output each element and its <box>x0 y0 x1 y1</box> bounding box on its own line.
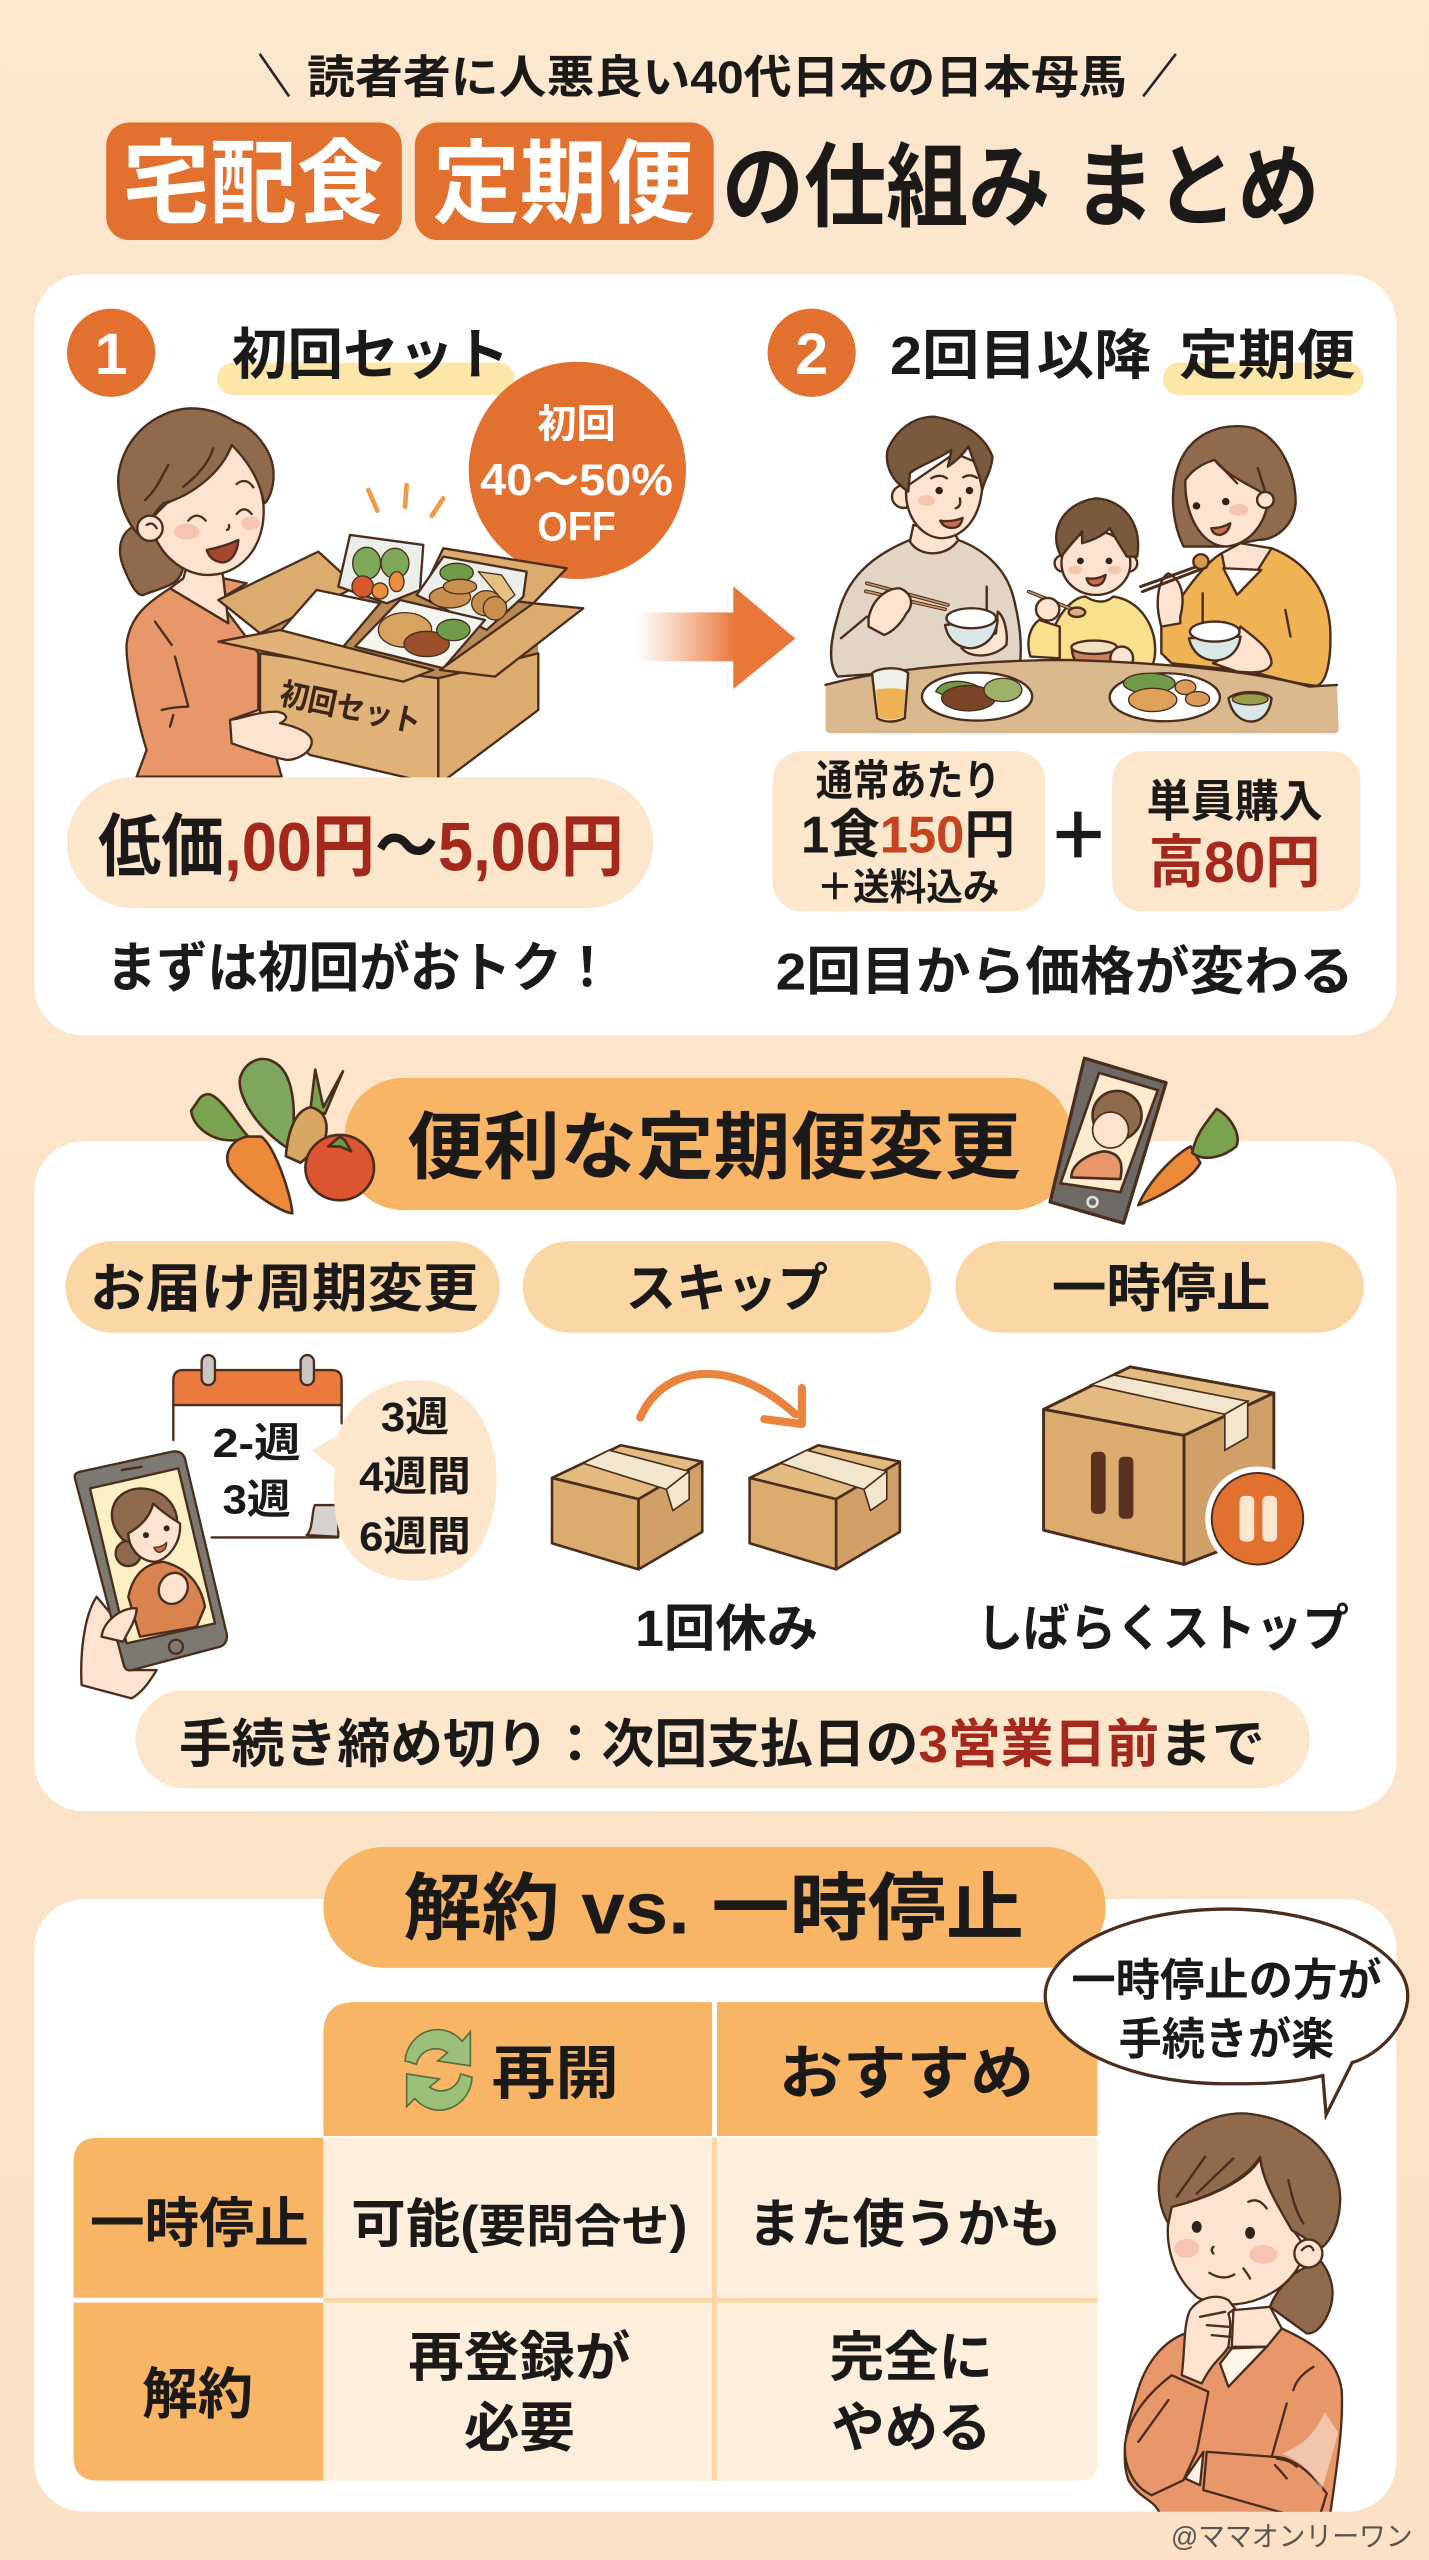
icon: vegetables left <box>191 1059 374 1213</box>
step 1 number <box>67 309 155 397</box>
header: recommended: おすすめ <box>779 2042 1034 2107</box>
step 2 heading <box>890 326 1364 395</box>
single purchase box: 単員購入 <box>1146 778 1323 827</box>
price pill: 低価,00円〜5,00円 <box>98 808 624 885</box>
arrow <box>637 586 795 689</box>
tab: skip <box>523 1241 931 1333</box>
tab: pause: 一時停止 <box>1052 1260 1271 1318</box>
icon: calendar <box>173 1355 342 1537</box>
title: 定期便 <box>433 134 694 236</box>
tab: skip: スキップ <box>625 1260 828 1318</box>
comparison table <box>74 2002 1097 2481</box>
row header: pause: 一時停止 <box>90 2194 309 2254</box>
title: 宅配食 <box>123 134 384 236</box>
heading pill <box>345 1078 1071 1210</box>
cell: quit entirely: やめる <box>831 2398 991 2458</box>
title: の仕組み まとめ <box>722 137 1320 239</box>
heading pill: 解約 vs. 一時停止 <box>403 1867 1024 1950</box>
heading pill: 便利な定期便変更 <box>407 1106 1021 1189</box>
regular price box: 通常あたり <box>816 757 1000 804</box>
panel: convenient changes <box>34 1058 1396 1811</box>
icon: skip arrow <box>640 1374 802 1424</box>
step 1 heading: 初回セット <box>232 324 510 386</box>
caption: price changes: 2回目から価格が変わる <box>776 944 1354 1002</box>
icon: paused box <box>1044 1367 1310 1571</box>
price pill <box>67 777 653 908</box>
cell: re-registration: 必要 <box>464 2398 575 2458</box>
step 2 heading: 定期便 <box>1179 326 1356 386</box>
single purchase box: 高80円 <box>1149 831 1320 895</box>
title <box>106 122 1320 240</box>
cell: possible: 可能(要問合せ ) <box>351 2196 688 2254</box>
caption: pause: しばらくストップ <box>977 1600 1349 1657</box>
step 2 number: 2 <box>795 322 828 387</box>
illustration: thinking woman <box>1125 2113 1342 2517</box>
caption: skip: 1回休み <box>635 1600 818 1657</box>
discount badge <box>469 362 686 579</box>
discount badge: 40〜50% <box>480 456 673 505</box>
icon: refresh <box>405 2030 472 2110</box>
regular price box: ＋送料込み <box>817 866 999 908</box>
icon: phone in hand <box>75 1451 227 1698</box>
speech oval: cycle options: 4週間 <box>359 1454 471 1500</box>
illustration: family eating <box>826 417 1339 733</box>
cell: re-registration <box>408 2328 630 2458</box>
step 2 number <box>768 309 856 397</box>
header: restart: 再開 <box>492 2042 619 2107</box>
single purchase box <box>1112 751 1360 911</box>
speech bubble: 手続きが楽 <box>1119 2015 1334 2064</box>
subtitle: 読者者に人悪良い40代日本の日本母馬 <box>307 52 1127 103</box>
cell: quit entirely <box>830 2328 993 2458</box>
cell: may use again: また使うかも <box>748 2196 1062 2254</box>
icon: box 2 <box>750 1445 900 1569</box>
discount badge: 初回 <box>537 404 616 447</box>
row header: cancel: 解約 <box>142 2364 253 2426</box>
icon: box 1 <box>552 1445 702 1569</box>
speech oval: cycle options: 6週間 <box>359 1514 471 1560</box>
caption: first order: まずは初回がおトク！ <box>106 938 612 998</box>
heading pill <box>323 1847 1106 1968</box>
tab: pause <box>955 1241 1364 1333</box>
panel: step 1 and step 2 <box>34 274 1396 1035</box>
illustration: woman holding box <box>118 408 583 785</box>
speech oval: cycle options: 3週 <box>381 1394 449 1440</box>
speech oval: cycle options <box>312 1380 497 1581</box>
cell: quit entirely: 完全に <box>830 2328 993 2388</box>
discount badge: OFF <box>537 504 616 550</box>
tab: delivery cycle: お届け周期変更 <box>90 1260 479 1318</box>
icon: phone and carrot right <box>1050 1058 1238 1223</box>
hand <box>230 712 312 760</box>
regular price box: 1食150円 <box>801 806 1015 864</box>
cell: re-registration: 再登録が <box>408 2328 630 2388</box>
step 2 heading: 2回目以降 <box>890 326 1151 386</box>
watermark: @ママオンリーワン <box>1171 2521 1413 2552</box>
step 1 number: 1 <box>95 322 127 387</box>
plus sign <box>1057 812 1101 857</box>
speech bubble: 一時停止の方が <box>1071 1957 1382 2006</box>
box label: 初回セット <box>277 677 424 740</box>
deadline note <box>136 1690 1310 1788</box>
regular price box <box>772 751 1045 911</box>
icon: calendar: 2-週 <box>212 1420 301 1466</box>
panel: cancel vs pause <box>34 1847 1408 2517</box>
icon: calendar: 3週 <box>222 1476 291 1522</box>
tab: delivery cycle <box>65 1241 500 1333</box>
speech bubble <box>1045 1909 1408 2115</box>
deadline note: 手続き締め切り：次回支払日の 3営業日前まで <box>179 1716 1265 1774</box>
